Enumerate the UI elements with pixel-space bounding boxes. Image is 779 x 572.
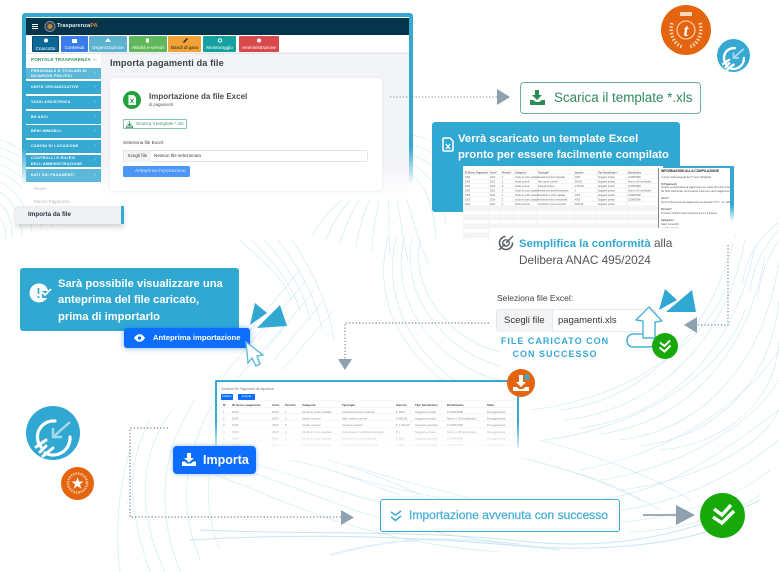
nav buttons [32, 36, 279, 52]
nav: contenuti: Contenuti [65, 45, 84, 50]
table: template: Periodo* [502, 172, 512, 174]
data table: Investimenti in attività finanziarie [342, 430, 384, 434]
button: indietro: Indietro [222, 394, 232, 398]
data table: 3 [285, 423, 287, 427]
data table: 2023 [272, 410, 279, 414]
upload field button: Scegli file [504, 315, 545, 326]
table: template: Uscite in conto capitale [515, 194, 539, 197]
data table: ID elenco pagamento [232, 403, 261, 407]
menu item: DELL'AMMINISTRAZIONE [31, 162, 82, 166]
table: template: 2024 [490, 200, 496, 202]
button: scarica il template: Scarica il template *.xls [554, 90, 692, 105]
dotted arrow: to upload [684, 245, 729, 333]
table: template: 2023 [490, 177, 496, 179]
data table: 1234567890 [447, 423, 463, 427]
icon: excel file [123, 91, 141, 109]
table: template: Investimenti beni materiali [538, 176, 565, 179]
table: template: 3 [502, 186, 504, 188]
menu item: BENI IMMOBILI [31, 129, 62, 133]
data table: 2 [285, 416, 287, 420]
menu item: CANONI DI LOCAZIONE [31, 144, 79, 148]
data table: 1234567890 [447, 443, 463, 447]
table: template: Soggetto privato [598, 176, 615, 179]
table: template: 6000,00 [575, 204, 584, 206]
data table: Soggetto giuridico [415, 443, 439, 447]
sidebar [26, 56, 101, 206]
menu item [26, 140, 101, 154]
badge: emblem orange [61, 467, 94, 500]
menu item: UNITÀ ORGANIZZATIVE [31, 85, 79, 89]
upload field button [497, 310, 553, 332]
field button [124, 151, 151, 162]
data table: Investimenti beni naturali [342, 410, 374, 414]
data table: 1000 [232, 423, 239, 427]
table: template: 1000 [465, 182, 471, 184]
table: template: 1000 [465, 195, 471, 197]
table: template: Uscite correnti [515, 180, 530, 184]
arrow: to final check [643, 505, 695, 525]
data table: Contributi in conto capitale [342, 436, 376, 440]
data table: Uscite in conto capitale [302, 436, 332, 440]
data table: € 1 [396, 430, 400, 434]
compilation info: INFORMAZIONI ALLA COMPILAZIONE [661, 169, 719, 173]
nav: amministrazione: Amministrazione [242, 45, 276, 50]
table: template: Soggetto privato [598, 194, 615, 197]
menu item: PERSONALE E TITOLARI DI [31, 68, 87, 72]
callout text [58, 278, 223, 323]
sidebar header: PORTALE TRASPARENZA [31, 58, 91, 63]
table: template: 2023 [490, 182, 496, 184]
table: template: 1234567890 [628, 195, 641, 197]
menu item: TASSI ASSISTENZA [31, 100, 71, 104]
frame border [215, 380, 519, 448]
compilation info: Trimestre di riferimento compreso tra 1 e 4 (intero) [661, 212, 717, 215]
compilation info: Se NON valorizzato verrà inserito inteso un nuovo pagamento. [661, 190, 730, 193]
button: indietro [221, 394, 233, 400]
data table: Soggetto giuridico [415, 423, 439, 427]
nav: bandi di gara [168, 36, 201, 52]
table: template: 2 [502, 200, 504, 202]
nav: contenuti [61, 36, 88, 52]
button: importa [173, 446, 256, 474]
divider under nav [26, 53, 409, 54]
compilation info: I campi contrassegnati da (*) sono obbligatori. [661, 176, 712, 178]
badge: laurel orange [661, 5, 711, 55]
nav icons [44, 38, 261, 43]
data table: Beneficiario [447, 403, 464, 407]
table: template: 4500 [575, 200, 581, 202]
preview button [123, 166, 190, 177]
table: template: Soggetto privato [598, 198, 615, 202]
table: template: Investimenti beni immateriali [538, 198, 567, 202]
table: template: 1000 [465, 190, 471, 192]
table: template: Soggetto privato [598, 185, 615, 188]
table: template: 1 [575, 190, 577, 192]
box: importazione avvenuta [380, 499, 620, 532]
data table: 2023 [272, 430, 279, 434]
data table: 3 [223, 423, 225, 427]
icon: excel file [442, 137, 454, 152]
table: template: Contributi in conto esercizio [538, 203, 567, 206]
button: scarica il template [520, 82, 701, 114]
data table: € 1500 [396, 436, 405, 440]
table: template: 2 [502, 182, 504, 184]
data table: Stato [487, 403, 494, 407]
table: template: 1000 [465, 177, 471, 179]
upload field label: Seleziona file Excel: [497, 293, 573, 303]
icon: target [498, 236, 514, 250]
compilation info: Categoria:* [661, 219, 674, 222]
nav: attività e servizi: Attività e servizi [132, 45, 164, 50]
menu item [26, 96, 101, 110]
nav: amministrazione [239, 36, 279, 52]
data table: Interessi passivi [342, 423, 363, 427]
table: template: 2023 [490, 190, 496, 192]
table: template: Anno* [490, 172, 497, 174]
table: template: Altre spese correnti [538, 180, 558, 184]
table: template: Nome o ID beneficiario [628, 180, 652, 184]
page title: Importa pagamenti da file [110, 58, 224, 68]
data table: 2 [223, 416, 225, 420]
data table: Da aggiornare [487, 443, 506, 447]
icon: cursor [245, 340, 265, 367]
table: template: Categoria* [515, 172, 527, 174]
data table: Categoria [302, 403, 316, 407]
icon: spark triangles right [659, 289, 696, 312]
icon: upload arrow [626, 306, 663, 348]
table: template: 1500 [575, 195, 581, 197]
data table: 2024 [272, 443, 279, 447]
callout text: Sarà possibile visualizzare una [58, 278, 223, 290]
preview button: Anteprima importazione [135, 169, 186, 174]
menu item [26, 125, 101, 139]
callout text: pronto per essere facilmente compilato [458, 149, 669, 161]
data table: Uscite correnti [302, 416, 321, 420]
data table: € 500,50 [396, 416, 408, 420]
frame border [22, 13, 413, 200]
data table: 5 [223, 436, 225, 440]
table: template: 1000 [575, 177, 581, 179]
menu item [26, 68, 101, 80]
submenu [26, 183, 101, 207]
icon: download small [126, 121, 133, 128]
menu item [26, 155, 101, 168]
compilation info: Valori consentiti: [661, 223, 679, 226]
table: template: Uscite in conto capitale [515, 198, 539, 202]
panel: import card [110, 78, 382, 191]
button: importa small: Importa [242, 394, 251, 398]
table: template: 2023 [490, 186, 496, 188]
table: template: Investimenti attività finanziarie [538, 190, 569, 192]
preview blue edge [730, 166, 734, 222]
data table: Altre spese correnti [342, 416, 367, 420]
callout: anteprima [20, 268, 239, 331]
icon: double check [390, 510, 402, 522]
table: template: 4 [502, 190, 504, 192]
compilation info: Periodo:* [661, 208, 672, 211]
table: template: 1.200,00 [575, 186, 585, 188]
table: template: Uscite correnti [515, 203, 530, 206]
data table: 1000 [232, 410, 239, 414]
status: file caricato: FILE CARICATO CON [501, 336, 609, 346]
menu item: DATI SUI PAGAMENTI [31, 173, 75, 177]
table: template: 2024 [490, 204, 496, 206]
button: anteprima importazione: Anteprima importazione [153, 333, 240, 342]
button: importa: Importa [203, 453, 249, 467]
fade [213, 422, 521, 460]
icon: menu [32, 24, 38, 29]
menu item: INCARICHI POLITICI [31, 74, 72, 78]
data table: 1 [223, 410, 225, 414]
button: importa small [238, 394, 255, 400]
note text: Semplifica la conformità alla [519, 236, 672, 250]
table: template: 1000 [465, 200, 471, 202]
template button: Scarica il template *.xls [136, 121, 184, 126]
panel: import preview table [215, 380, 519, 458]
note text line 2: Delibera ANAC 495/2024 [519, 253, 651, 267]
table: template: Soggetto privato [598, 190, 615, 192]
table: template: 2024 [490, 195, 496, 197]
data table: 1234567890 [447, 436, 463, 440]
data table: 2023 [272, 423, 279, 427]
data table: 1000 [232, 430, 239, 434]
icon: spark triangles left [250, 303, 287, 328]
data table: 1 [285, 410, 287, 414]
table: template: Uscite in conto capitale [515, 190, 539, 192]
badge: laurel orange: t [684, 21, 690, 40]
template button [123, 119, 187, 129]
menu item [26, 81, 101, 95]
compilation info: Anno:* [661, 197, 669, 200]
icon: final success check [700, 493, 745, 538]
table: template: ID Elenco Pagamenti [465, 172, 488, 174]
top bar [26, 18, 409, 35]
table: template: 1 [502, 177, 504, 179]
selected menu: importa da file: Importa da file [28, 211, 71, 218]
callout: template excel [432, 122, 680, 212]
table: template [463, 167, 658, 243]
data table: Uscite in conto capitale [302, 430, 332, 434]
icon: download [530, 90, 545, 105]
logo text: TrasparenzaPA [57, 22, 98, 28]
table: template: Uscite in conto capitale [515, 176, 539, 179]
field value: Nessun file selezionato [154, 153, 201, 158]
icon: info check [30, 284, 52, 302]
callout text: Verrà scaricato un template Excel [458, 133, 638, 145]
table: template: 1 [502, 195, 504, 197]
dotted arrow: to table [338, 322, 489, 370]
table: template: Beneficiario [628, 172, 642, 174]
table: template: Nome o ID beneficiario [628, 190, 652, 192]
table: template: 1234567890 [628, 200, 641, 202]
data table: Uscite in conto capitale [302, 443, 332, 447]
data table: Da aggiornare [487, 436, 506, 440]
field button: Scegli file [128, 153, 147, 158]
table: template: 1000 [465, 204, 471, 206]
data table: Da aggiornare [487, 430, 506, 434]
table: template: Interessi passivi [538, 185, 555, 188]
table: template: Contributi in conto capitale [538, 194, 566, 197]
data table: Nome o ID beneficiario [447, 430, 477, 434]
data table: Soggetto privato [415, 410, 436, 414]
compilation info [658, 168, 730, 228]
nav: cruscotto [32, 36, 59, 52]
data table: Uscite in conto capitale [302, 410, 332, 414]
icon: success check small [652, 333, 678, 359]
table: template: Soggetto privato [598, 180, 615, 184]
nav: monitoraggio: Monitoraggio [206, 45, 233, 50]
table: template: 1234567890 [628, 186, 641, 188]
icon: eye [134, 334, 145, 342]
table: template: 500,50 [575, 182, 583, 184]
callout text [458, 133, 669, 161]
data table: Importo [396, 403, 407, 407]
data table: € 1000 [396, 410, 405, 414]
file field label: Seleziona file Excel: [123, 140, 164, 145]
upload field [496, 309, 656, 332]
data table: Periodo [285, 403, 296, 407]
menu item: CONTROLLI E RILIEVI [31, 156, 76, 160]
table: template: Uscite correnti [515, 185, 530, 188]
compilation info: Anno di riferimento del pagamento nel formato YYYY - es. 2024 [661, 201, 730, 204]
data table [221, 400, 514, 447]
table: template: Tipo Beneficiario * [598, 172, 618, 174]
icon: logo seal [44, 21, 56, 32]
table: template: Importo [575, 172, 584, 174]
submenu: nuovo: Nuovo [34, 186, 47, 191]
sidebar header: ← [92, 56, 99, 63]
file field [123, 150, 368, 162]
dotted arrow: to template [390, 89, 510, 105]
data table: 1 [285, 436, 287, 440]
callout text: prima di importarlo [58, 311, 160, 323]
icon: plug badge top right [717, 39, 750, 72]
icon: download white [182, 453, 196, 466]
sidebar header [26, 54, 101, 68]
status: file caricato [501, 336, 609, 359]
data table: Soggetto privato [415, 416, 436, 420]
data table: 4 [223, 430, 225, 434]
table: template: 1234567890 [628, 177, 641, 179]
box: importazione avvenuta: Importazione avvenuta con successo [409, 508, 608, 522]
table title: Gestione file Pagamenti da importare [221, 387, 274, 391]
data table: Soggetto giuridico [415, 436, 439, 440]
data table: 1000 [232, 436, 239, 440]
data table: Tipologia [342, 403, 355, 407]
compilation info: ID Pagamenti [661, 183, 677, 186]
status: file caricato: CON SUCCESSO [512, 349, 598, 359]
data table: Uscite correnti [302, 423, 321, 427]
card heading: Importazione da file Excel [149, 92, 247, 101]
data table: Soggetto privato [415, 430, 436, 434]
nav: organizzazione [89, 36, 127, 52]
data table: Anno [272, 403, 280, 407]
main area [101, 52, 409, 200]
nav: organizzazione: Organizzazione [92, 45, 124, 50]
card subheading: di pagamenti [149, 102, 173, 107]
data table: Tipo beneficiario [415, 403, 438, 407]
menu item [26, 111, 101, 125]
upload field value: pagamenti.xls [558, 315, 617, 326]
data table: 1000 [232, 443, 239, 447]
panel: excel template preview [463, 166, 734, 243]
nav: monitoraggio [203, 36, 236, 52]
menu item: BILANCI [31, 115, 48, 119]
data table: € 1.200,00 [396, 423, 410, 427]
data table: Da aggiornare [487, 410, 506, 414]
table: template: 3 [502, 204, 504, 206]
data table: 4 [285, 430, 287, 434]
selected menu: importa da file [16, 206, 124, 224]
table: template: 1000 [465, 186, 471, 188]
dotted arrow: to confirmation [129, 427, 354, 525]
data table: Da aggiornare [487, 416, 506, 420]
data table: Nome o ID beneficiario [447, 416, 477, 420]
nav: bandi di gara: Bandi di gara [171, 45, 198, 50]
note: semplifica la conformità [490, 228, 710, 270]
submenu: elenco: Elenco Pagamenti [34, 198, 70, 204]
table: template: Soggetto privato [598, 203, 615, 206]
nav: attività e servizi [129, 36, 167, 52]
data table: N° [223, 403, 227, 407]
data table: Investimenti beni immateriali [342, 443, 379, 447]
data table: 1000 [232, 416, 239, 420]
icon: download badge orange [507, 369, 535, 397]
data table: 2024 [272, 436, 279, 440]
data table: € 4500 [396, 443, 405, 447]
button: anteprima importazione [124, 328, 250, 348]
table: template: Tipologia* [538, 172, 549, 174]
data table: Da aggiornare [487, 423, 506, 427]
icon: plug badge large [26, 406, 80, 460]
data table: 6 [223, 443, 225, 447]
data table: 2023 [272, 416, 279, 420]
callout text: anteprima del file caricato, [58, 294, 199, 306]
nav: cruscotto: Cruscotto [36, 46, 55, 51]
data table: 2 [285, 443, 287, 447]
data table: 1234567890 [447, 410, 463, 414]
menu item [26, 169, 101, 183]
panel: application screenshot [22, 13, 413, 200]
